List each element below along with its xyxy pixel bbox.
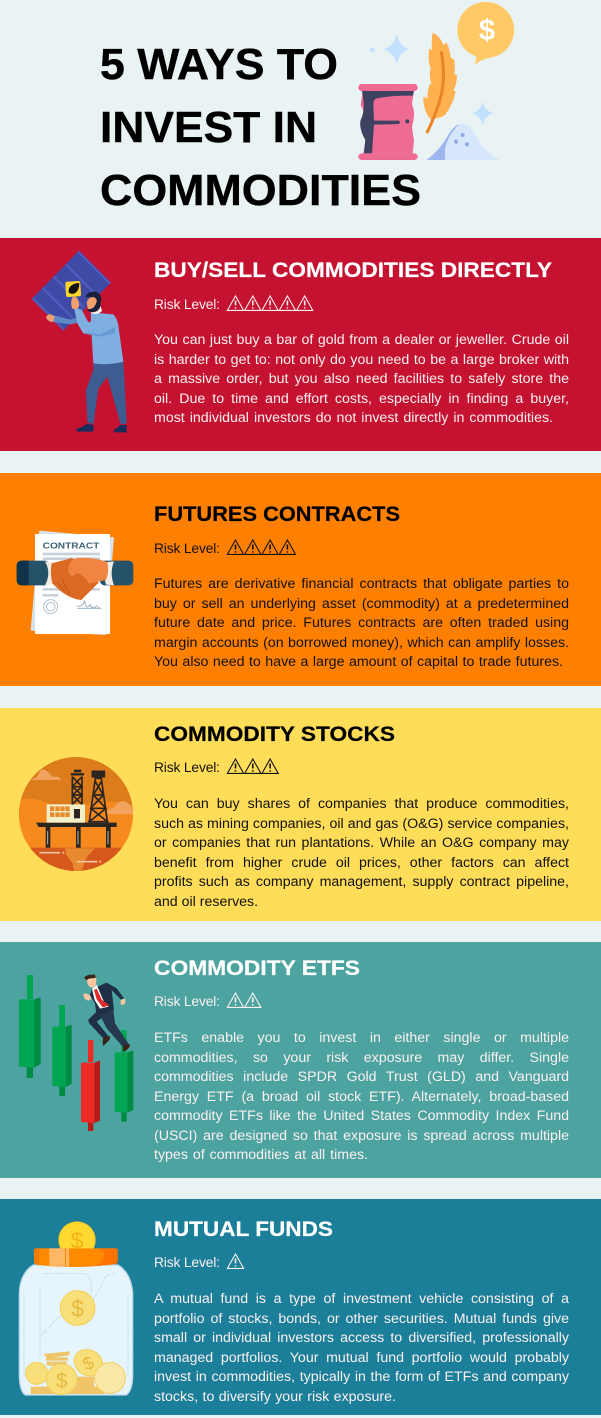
body text: stocks, to diversify your risk exposure. bbox=[154, 1389, 396, 1405]
body text bbox=[154, 332, 569, 426]
body text: small or individual investors access to diversified, professionally bbox=[154, 1330, 569, 1346]
body text: oil. Due to time and effort costs, especially in finding a buyer, bbox=[154, 391, 569, 407]
body text: portfolio of stocks, bonds, or other securities. Mutual funds give bbox=[154, 1311, 569, 1327]
body text: such as mining companies, oil and gas (O&G) service companies, bbox=[154, 816, 569, 832]
risk level: 3: Risk Level: bbox=[154, 760, 220, 775]
man bbox=[46, 292, 127, 432]
body text: You can just buy a bar of gold from a dealer or jeweller. Crude oil bbox=[154, 332, 569, 348]
body text: ETFs enable you to invest in either single or multiple bbox=[154, 1030, 569, 1046]
body text: commodities, so your risk exposure may differ. Single bbox=[154, 1050, 569, 1066]
body text bbox=[154, 1291, 570, 1405]
heading: COMMODITY STOCKS bbox=[154, 723, 395, 746]
icon: coin jar bbox=[18, 1221, 134, 1396]
icon: sparkles bbox=[370, 33, 493, 126]
risk level: 1 bbox=[154, 1253, 244, 1270]
icon: feather bbox=[423, 33, 457, 132]
risk level: 5: Risk Level: bbox=[154, 297, 220, 312]
falling coin: $ bbox=[71, 1296, 84, 1322]
icon: offshore oil rig bbox=[19, 757, 133, 871]
panel: mutual funds bbox=[0, 1199, 601, 1415]
header bbox=[100, 2, 514, 215]
green candle 1 bbox=[19, 975, 41, 1078]
body text: most individual investors do not invest directly in commodities. bbox=[154, 410, 553, 426]
title bbox=[100, 40, 421, 215]
platform bbox=[36, 804, 117, 848]
panel: commodity etfs bbox=[0, 942, 601, 1178]
contract paper: CONTRACT bbox=[43, 540, 100, 550]
panel: commodity stocks bbox=[0, 708, 601, 921]
body text: a massive order, but you also need facilities to safely store the bbox=[154, 371, 569, 387]
heading: FUTURES CONTRACTS bbox=[154, 503, 400, 526]
risk level: 4 bbox=[154, 539, 296, 556]
body text bbox=[154, 796, 569, 910]
panel: futures contracts bbox=[0, 473, 601, 686]
body text: commodity ETFs like the United States Commodity Index Fund bbox=[154, 1108, 569, 1124]
body text: You also need to have a large amount of capital to trade futures. bbox=[154, 654, 563, 670]
icon: dollar speech bubble: $ bbox=[479, 14, 495, 47]
title: 5 WAYS TO bbox=[100, 40, 338, 89]
body text: benefit from higher crude oil prices, other factors can affect bbox=[154, 855, 569, 871]
body text: You can buy shares of companies that produce commodities, bbox=[154, 796, 569, 812]
risk level: 4: Risk Level: bbox=[154, 541, 220, 556]
handshake bbox=[17, 558, 133, 600]
coin pile: $ bbox=[56, 1369, 68, 1392]
coin pile: $ bbox=[80, 1352, 97, 1374]
body text bbox=[154, 1030, 569, 1163]
title: COMMODITIES bbox=[100, 166, 421, 215]
heading: BUY/SELL COMMODITIES DIRECTLY bbox=[154, 259, 552, 282]
body text: and oil reserves. bbox=[154, 894, 258, 910]
body text: A mutual fund is a type of investment vehicle consisting of a bbox=[154, 1291, 569, 1307]
risk level: 5 bbox=[154, 295, 314, 312]
body text: invest in commodities, typically in the form of ETFs and company bbox=[154, 1369, 569, 1385]
body text: profits such as company management, supply contract pipeline, bbox=[154, 874, 569, 890]
body text: (USCI) are designed so that exposure is spread across multiple bbox=[154, 1128, 569, 1144]
body text: managed portfolios. Your mutual fund portfolio would probably bbox=[154, 1350, 569, 1366]
heading: COMMODITY ETFS bbox=[154, 957, 360, 980]
icon: candlesticks and running businessman bbox=[19, 974, 134, 1131]
title: INVEST IN bbox=[100, 103, 317, 152]
risk level: 3 bbox=[154, 758, 280, 775]
contract paper bbox=[31, 531, 114, 635]
icon: powder pile bbox=[427, 124, 500, 160]
body text: margin accounts (on borrowed money), which can amplify losses. bbox=[154, 635, 569, 651]
icon: contract and handshake bbox=[16, 530, 134, 635]
panel: buy/sell directly bbox=[0, 238, 601, 451]
top coin: $ bbox=[71, 1228, 84, 1254]
icon: man carrying oil barrel bbox=[32, 250, 127, 432]
jar glass bbox=[19, 1265, 133, 1395]
icon: dollar speech bubble bbox=[457, 2, 514, 65]
risk level: 2 bbox=[154, 992, 262, 1009]
lid bbox=[34, 1248, 118, 1267]
heading: MUTUAL FUNDS bbox=[154, 1218, 333, 1241]
oil label bbox=[65, 281, 81, 297]
rig scene bbox=[19, 757, 133, 871]
coin pile bbox=[26, 1344, 125, 1395]
barrel bbox=[32, 251, 111, 331]
risk level: 2: Risk Level: bbox=[154, 994, 220, 1009]
body text: Futures are derivative financial contracts that obligate parties to bbox=[154, 576, 569, 592]
businessman bbox=[83, 975, 130, 1052]
red candle bbox=[81, 1040, 100, 1131]
body text: buy or sell an underlying asset (commodity) at a predetermined bbox=[154, 596, 569, 612]
body text: future date and price. Futures contracts are often traded using bbox=[154, 615, 569, 631]
body text: commodities include SPDR Gold Trust (GLD) and Vanguard bbox=[154, 1069, 569, 1085]
body text: Energy ETF (a broad oil stock ETF). Alternately, broad-based bbox=[154, 1089, 569, 1105]
derricks bbox=[71, 771, 109, 822]
body text: or companies that run plantations. While an O&G company may bbox=[154, 835, 569, 851]
risk level: 1: Risk Level: bbox=[154, 1255, 220, 1270]
body text: types of commodities at all times. bbox=[154, 1147, 368, 1163]
top coin bbox=[59, 1222, 95, 1258]
body text: is harder to get to: not only do you need to be a large broker with bbox=[154, 352, 569, 368]
icon: barrel bbox=[358, 84, 418, 160]
icon: commodities cluster bbox=[358, 2, 514, 160]
falling coin bbox=[60, 1291, 95, 1325]
green candle 2 bbox=[52, 1005, 72, 1096]
body text bbox=[154, 576, 569, 670]
green candle 3 bbox=[115, 1030, 133, 1122]
